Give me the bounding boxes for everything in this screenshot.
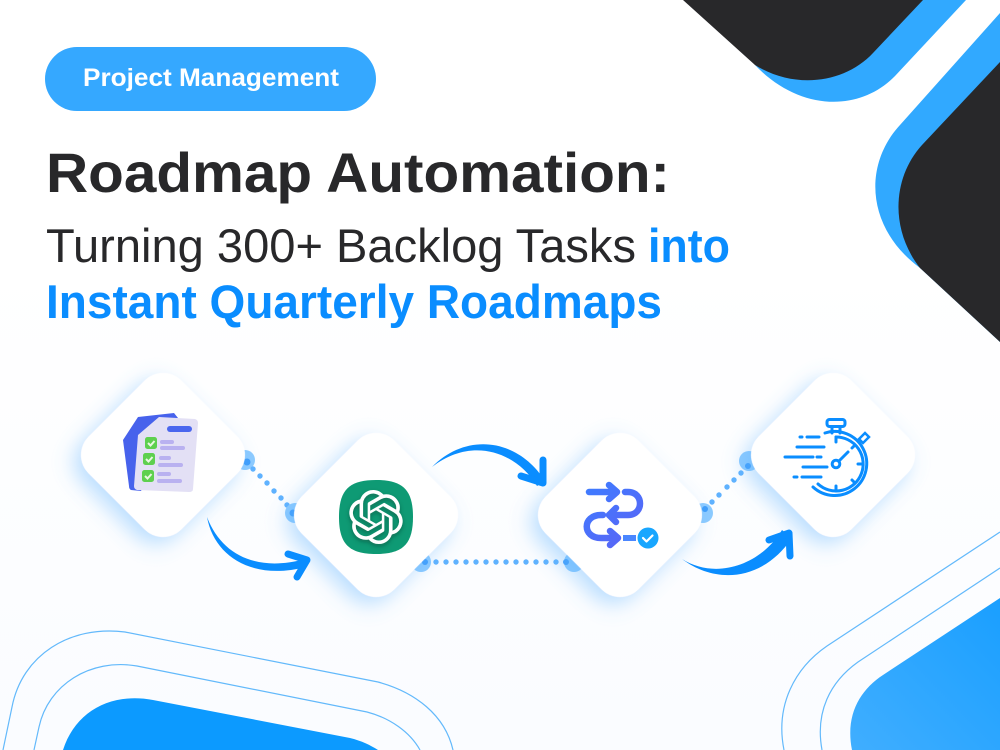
arrow: ChatGPT to workflow [432, 444, 545, 486]
title: Turning 300+ Backlog Tasks [46, 219, 636, 272]
top right corner shape [683, 0, 966, 102]
bottom left decorative shape [3, 631, 453, 750]
category pill: Project Management [83, 64, 340, 92]
dotted connector: tasks to ChatGPT [235, 450, 305, 523]
title: Instant Quarterly Roadmaps [46, 275, 662, 328]
arrow: tasks to ChatGPT [207, 517, 307, 577]
icon: stopwatch with speed lines [785, 420, 869, 495]
dotted connector: ChatGPT to roadmap [411, 552, 584, 572]
arrow: workflow to stopwatch [682, 530, 792, 575]
icon: workflow arrows with check [587, 485, 658, 548]
panel: fast quarterly roadmap [740, 362, 926, 548]
title: into [648, 219, 730, 272]
icon: ChatGPT logo [339, 480, 413, 554]
title [46, 141, 730, 328]
icon: task checklist [123, 413, 198, 492]
title: Roadmap Automation: [46, 141, 670, 204]
category pill [45, 47, 376, 111]
panel: backlog tasks [70, 362, 256, 548]
bottom right decorative shape [782, 532, 1000, 750]
panel: ChatGPT [283, 422, 469, 608]
right corner shape [875, 13, 1000, 342]
panel: automated workflow [527, 422, 713, 608]
dotted connector: roadmap to stopwatch [693, 451, 759, 523]
